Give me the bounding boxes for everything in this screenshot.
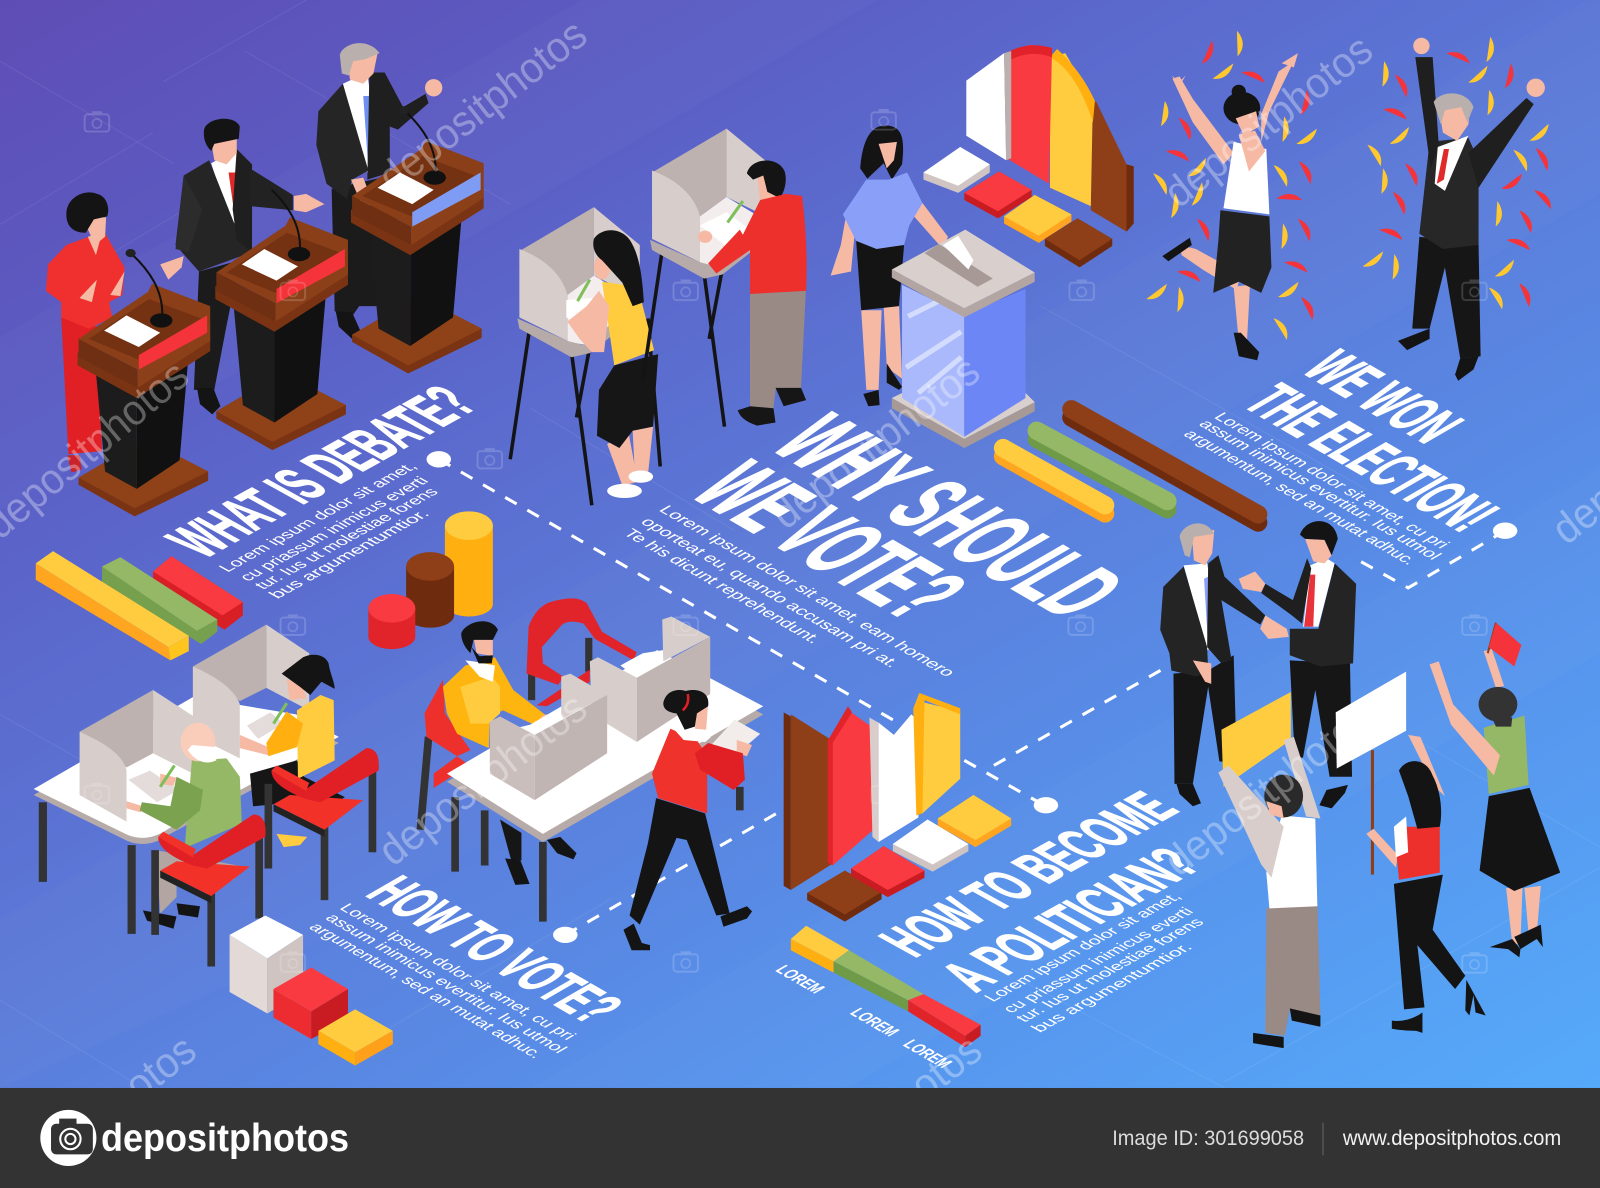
woman in yellow at table — [240, 655, 345, 847]
heading: why should we vote — [668, 401, 1149, 634]
footer logo wordmark: depositphotos — [101, 1117, 349, 1160]
red chair behind woman — [268, 748, 379, 900]
rods chart — [1003, 409, 1258, 523]
text: debate body: tur. Ius ut molestiae forens — [250, 485, 443, 592]
elderly man in green — [127, 723, 243, 929]
protester woman with flag — [1430, 623, 1560, 957]
voting booth left — [510, 207, 660, 505]
footer image id: Image ID: 301699058 — [1112, 1126, 1304, 1150]
heading: why should we vote: WE VOTE? — [668, 447, 991, 634]
man in red hoodie voting — [698, 161, 807, 426]
heading: why should we vote: WHY SHOULD — [748, 401, 1149, 632]
watermark text: depositphotos — [369, 10, 596, 202]
man at back podium — [316, 43, 442, 339]
watermark text: depositphotos — [1155, 25, 1382, 217]
woman celebrating — [1162, 53, 1298, 360]
footer url: www.depositphotos.com — [1342, 1126, 1561, 1150]
footer bar — [0, 1088, 1600, 1188]
text: how to vote body: Lorem ipsum dolor sit amet, cu pri — [335, 901, 580, 1043]
right voting table — [447, 650, 763, 922]
watermark text: depositphotos — [369, 684, 596, 875]
text: debate body — [214, 460, 443, 601]
text: debate body: bus argumentumtior. — [264, 507, 434, 601]
heading: how to become a politician — [865, 784, 1215, 1000]
watermark camera icons — [85, 109, 1487, 973]
text: politician body — [980, 890, 1208, 1035]
dashed connector lines — [439, 459, 1505, 935]
chart labels: LOREM — [771, 962, 830, 996]
glass ballot box — [892, 230, 1035, 448]
man in yellow sweater seated — [420, 621, 577, 885]
booths on right table — [490, 616, 710, 800]
text: vote reasons body: oporteat eu, quando accusam pri at. — [636, 515, 904, 670]
two men shaking hands — [1160, 521, 1356, 808]
heading: we won the election: WE WON — [1287, 341, 1478, 452]
woman casting ballot — [831, 125, 948, 406]
footer divider — [1322, 1123, 1323, 1155]
cubes bottom left — [230, 915, 393, 1066]
watermark text: depositphotos — [1155, 694, 1382, 886]
woman in red at front podium — [46, 192, 124, 473]
text: debate body: cu priassum inimicus everti — [235, 474, 433, 584]
watermark text: depositphotos — [762, 347, 989, 539]
chart: bottom squares — [807, 795, 1011, 922]
heading: we won the election — [1228, 341, 1514, 541]
heading: how to vote: HOW TO VOTE? — [353, 868, 637, 1032]
man celebrating — [1398, 38, 1545, 381]
text: politician body: tur. Ius ut molestiae forens — [1011, 915, 1208, 1025]
woman in yellow voting — [566, 230, 658, 498]
text: election body: Lorem ipsum dolor sit amet, cu pri — [1210, 410, 1454, 551]
protester man with yellow sign — [1218, 692, 1320, 1048]
footer logo icon — [40, 1110, 96, 1166]
man at middle podium — [160, 119, 324, 414]
woman walking with paper — [623, 690, 760, 950]
chart: bottom 3D bars — [784, 693, 960, 890]
voting booth right — [643, 129, 793, 427]
booths on left table — [80, 625, 309, 822]
chart: top 3D bars — [966, 45, 1134, 232]
text: politician body: bus argumentumtior. — [1027, 940, 1197, 1035]
chart: bottom stacked bar — [791, 926, 981, 1047]
text: election body: argumentum, sed an mutat adhuc. — [1179, 427, 1422, 567]
podium: middle with red panel — [215, 183, 348, 450]
connector dots — [427, 451, 1517, 943]
text: politician body: Lorem ipsum dolor sit amet, — [980, 890, 1186, 1004]
confetti — [1144, 31, 1553, 342]
protester woman with white sign — [1336, 672, 1486, 1033]
chart: left stacked bars — [36, 551, 243, 660]
text: debate body: Lorem ipsum dolor sit amet, — [214, 460, 421, 575]
chart labels — [771, 962, 957, 1071]
podium: front with red panel — [78, 249, 210, 516]
text: politician body: cu priassum inimicus everti — [998, 905, 1198, 1015]
chart: cylinders — [368, 511, 493, 649]
chart: top squares — [923, 147, 1112, 267]
red chair behind table — [527, 598, 637, 706]
red chair front — [155, 814, 266, 967]
text: vote reasons body: Te his dicunt reprehendunt. — [619, 526, 826, 646]
heading: how to become a politician: HOW TO BECOME — [865, 784, 1193, 965]
heading: how to become a politician: A POLITICIAN? — [927, 840, 1215, 1000]
text: how to vote body: argumentum, sed an mutat adhuc. — [305, 920, 548, 1061]
podium: back with blue panel — [351, 106, 484, 374]
heading: what is debate: WHAT IS DEBATE? — [152, 377, 493, 567]
left voting table — [34, 697, 339, 934]
text: how to vote body: assum inimicus evertitur. Ius utmol — [321, 911, 571, 1056]
text: vote reasons body: Lorem ipsum dolor sit amet, eam homero — [655, 503, 960, 679]
chart labels: LOREM — [846, 1005, 904, 1039]
text: election body: assum inimicus evertitur. Ius utmol — [1194, 417, 1446, 562]
chart labels: LOREM — [899, 1037, 957, 1071]
